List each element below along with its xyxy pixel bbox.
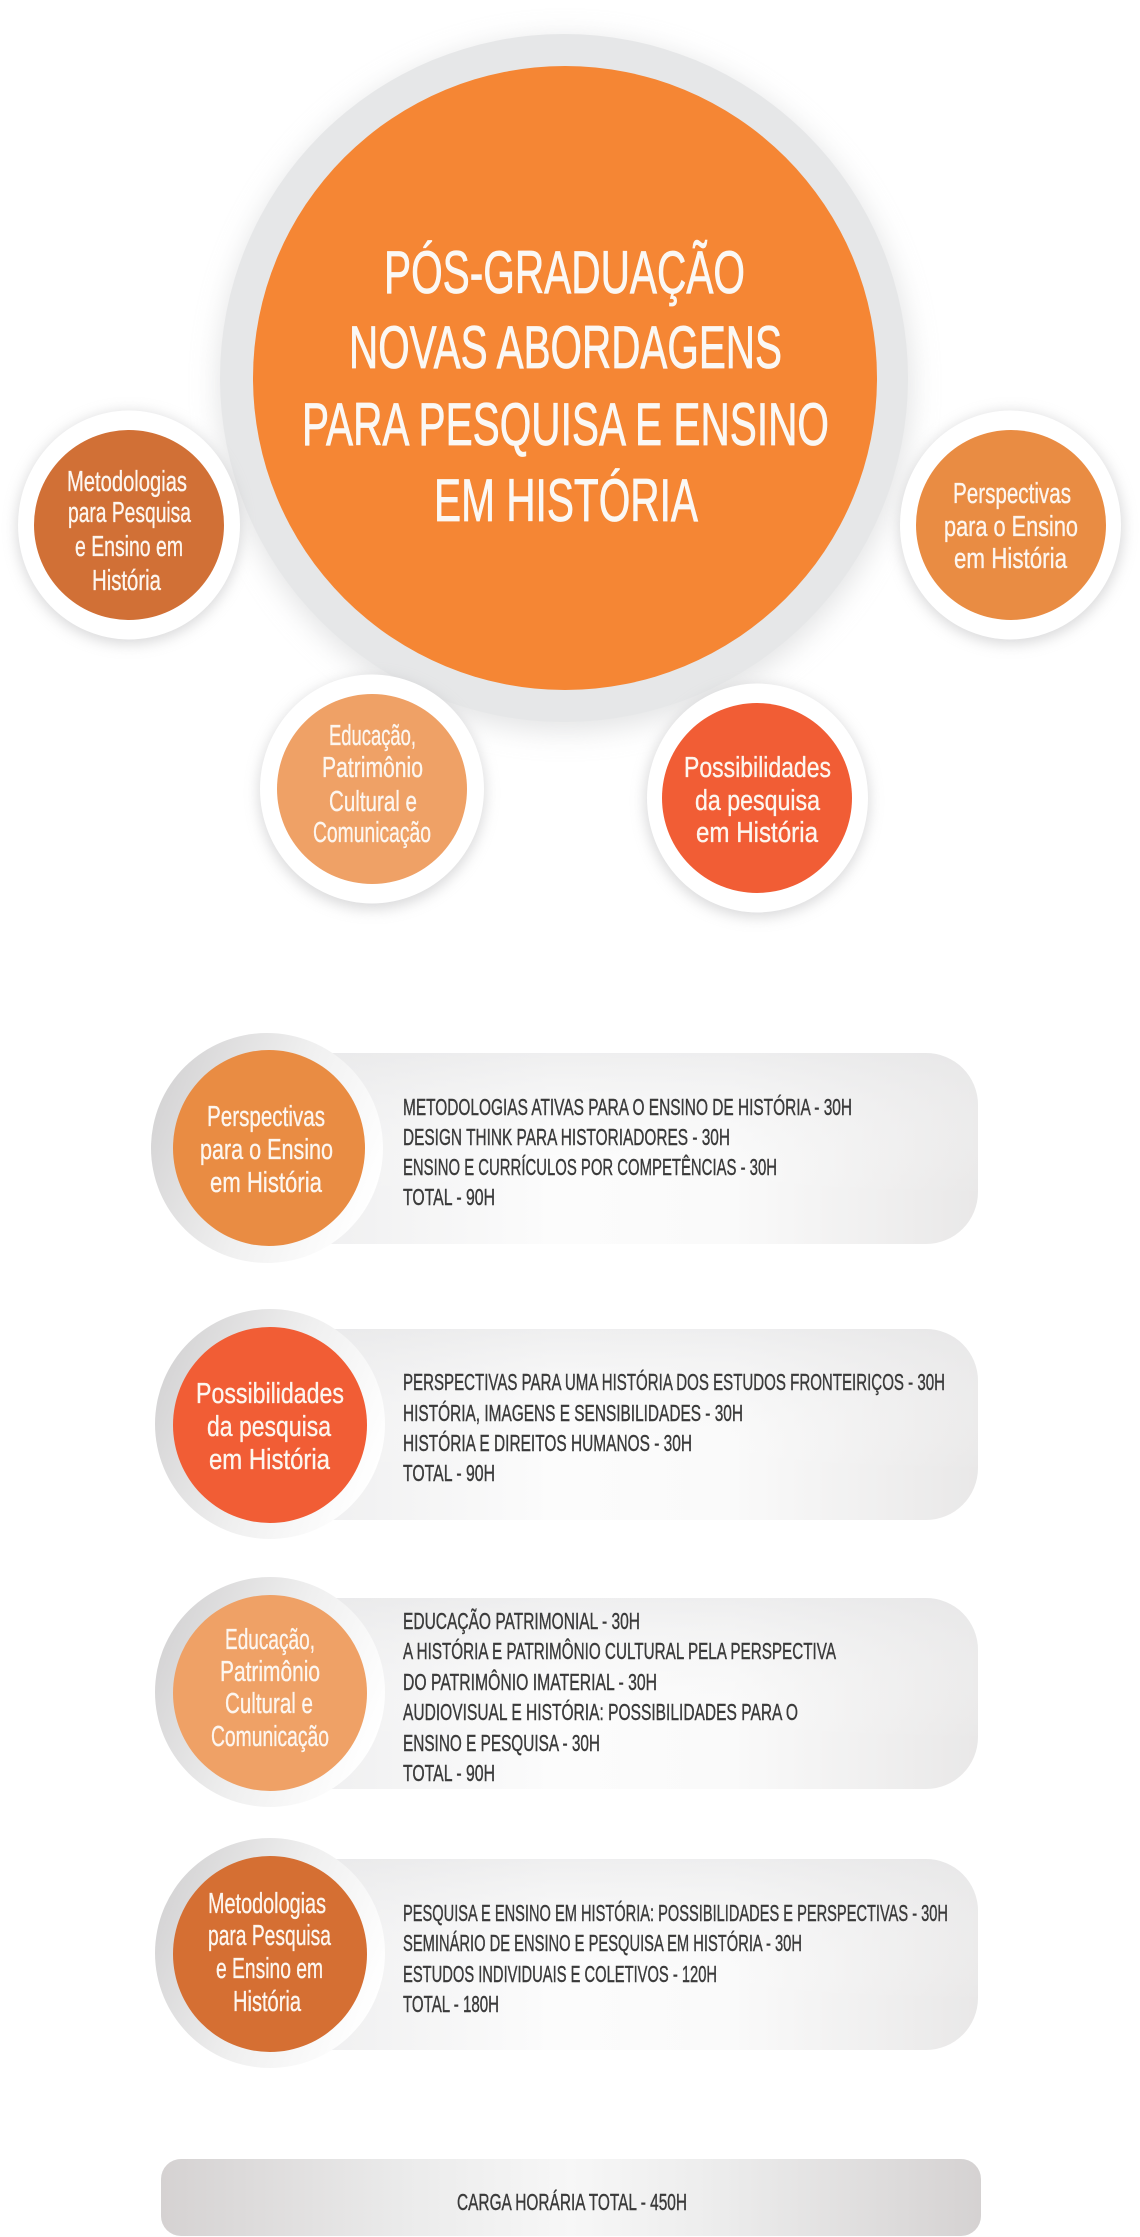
course list: SEMINÁRIO DE ENSINO E PESQUISA EM HISTÓRIA - 30H bbox=[403, 1930, 802, 1956]
panel: Perspectivas bbox=[151, 1033, 978, 1263]
course list: A HISTÓRIA E PATRIMÔNIO CULTURAL PELA PERSPECTIVA bbox=[403, 1637, 836, 1664]
badge text: da pesquisa bbox=[207, 1411, 331, 1443]
badge circle bbox=[173, 1856, 367, 2052]
circle: Possibilidades: em História bbox=[696, 817, 818, 849]
circle: Possibilidades: Possibilidades bbox=[684, 752, 831, 784]
circle: Metodologias: e Ensino em bbox=[75, 531, 183, 563]
title text: PARA PESQUISA E ENSINO bbox=[302, 391, 829, 458]
course list bbox=[403, 1608, 836, 1786]
course list bbox=[403, 1369, 945, 1486]
circle: Educação: Comunicação bbox=[313, 817, 431, 849]
badge text: em História bbox=[210, 1167, 322, 1199]
circle: Metodologias: para Pesquisa bbox=[68, 497, 191, 529]
course list: METODOLOGIAS ATIVAS PARA O ENSINO DE HISTÓRIA - 30H bbox=[403, 1094, 852, 1120]
course list: ESTUDOS INDIVIDUAIS E COLETIVOS - 120H bbox=[403, 1961, 717, 1987]
badge ring bbox=[155, 1577, 385, 1807]
badge text bbox=[196, 1378, 344, 1476]
total hours bar: CARGA HORÁRIA TOTAL - 450H bbox=[457, 2189, 687, 2215]
pill background bbox=[270, 1329, 978, 1520]
course list: HISTÓRIA, IMAGENS E SENSIBILIDADES - 30H bbox=[403, 1400, 743, 1426]
badge text: para Pesquisa bbox=[208, 1920, 331, 1952]
badge text: Metodologias bbox=[208, 1888, 326, 1920]
course list: TOTAL - 90H bbox=[403, 1760, 495, 1786]
badge text: Possibilidades bbox=[196, 1378, 344, 1410]
circle: Perspectivas: para o Ensino bbox=[944, 511, 1078, 543]
badge text: e Ensino em bbox=[216, 1953, 323, 1985]
circle: Educação: Cultural e bbox=[329, 786, 417, 818]
title text: PÓS-GRADUAÇÃO bbox=[384, 239, 745, 306]
badge ring bbox=[155, 1309, 385, 1539]
badge circle bbox=[173, 1327, 367, 1523]
badge text bbox=[208, 1888, 331, 2018]
course list: DESIGN THINK PARA HISTORIADORES - 30H bbox=[403, 1124, 730, 1150]
panel: Educação bbox=[155, 1577, 978, 1807]
circle: Possibilidades: da pesquisa bbox=[695, 785, 820, 817]
circle: Perspectivas: Perspectivas bbox=[953, 478, 1071, 510]
course list: TOTAL - 180H bbox=[403, 1991, 499, 2017]
course list: ENSINO E PESQUISA - 30H bbox=[403, 1730, 600, 1756]
badge text: em História bbox=[209, 1444, 330, 1476]
panel: Metodologias bbox=[155, 1838, 978, 2068]
total hours bar bbox=[161, 2159, 981, 2236]
circle: Educação bbox=[259, 674, 485, 909]
panel: Possibilidades bbox=[155, 1309, 978, 1539]
course list: HISTÓRIA E DIREITOS HUMANOS - 30H bbox=[403, 1430, 692, 1456]
title text: NOVAS ABORDAGENS bbox=[349, 314, 782, 381]
badge text: Perspectivas bbox=[207, 1101, 325, 1133]
badge ring bbox=[151, 1033, 383, 1263]
circle: Possibilidades bbox=[645, 684, 869, 917]
badge text: para o Ensino bbox=[200, 1134, 333, 1166]
circle: Educação: Educação, bbox=[329, 720, 416, 752]
circle: Metodologias: História bbox=[92, 565, 161, 597]
circle: Perspectivas bbox=[899, 410, 1123, 644]
badge text: Comunicação bbox=[211, 1721, 329, 1753]
badge text bbox=[200, 1101, 333, 1199]
course list: ENSINO E CURRÍCULOS POR COMPETÊNCIAS - 30H bbox=[403, 1154, 777, 1180]
badge text bbox=[211, 1624, 329, 1753]
course list: DO PATRIMÔNIO IMATERIAL - 30H bbox=[403, 1668, 657, 1695]
title text: EM HISTÓRIA bbox=[434, 467, 698, 534]
main circle with title bbox=[219, 34, 911, 731]
badge ring bbox=[155, 1838, 385, 2068]
pill background bbox=[270, 1053, 978, 1244]
course list: EDUCAÇÃO PATRIMONIAL - 30H bbox=[403, 1608, 640, 1634]
badge circle bbox=[173, 1050, 365, 1246]
circle: Metodologias: Metodologias bbox=[67, 466, 187, 498]
badge text: Patrimônio bbox=[220, 1656, 320, 1688]
pill background bbox=[270, 1859, 978, 2050]
course list: AUDIOVISUAL E HISTÓRIA: POSSIBILIDADES PARA O bbox=[403, 1699, 798, 1725]
course list bbox=[403, 1900, 948, 2017]
badge text: História bbox=[233, 1986, 301, 2018]
badge circle bbox=[173, 1595, 367, 1791]
badge text: Educação, bbox=[225, 1624, 315, 1656]
course list: TOTAL - 90H bbox=[403, 1460, 495, 1486]
circle: Perspectivas: em História bbox=[954, 543, 1067, 575]
badge text: Cultural e bbox=[225, 1688, 313, 1720]
course list: TOTAL - 90H bbox=[403, 1184, 495, 1210]
circle: Educação: Patrimônio bbox=[322, 752, 423, 784]
pill background bbox=[270, 1598, 978, 1789]
course list bbox=[403, 1094, 852, 1210]
title text bbox=[302, 239, 829, 534]
circle: Metodologias bbox=[17, 410, 241, 644]
